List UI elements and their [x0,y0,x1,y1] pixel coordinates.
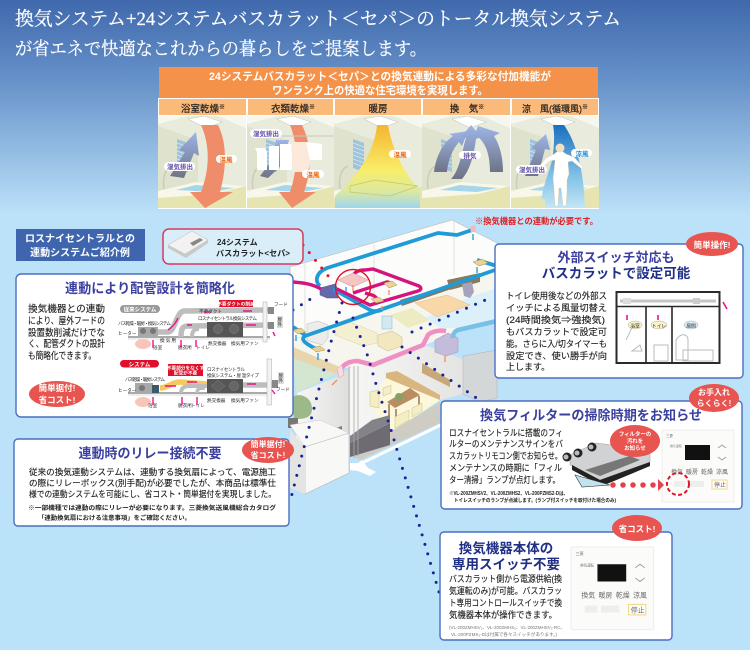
panel: simplified piping [16,274,293,417]
diagram: conventional system: トイレ [196,345,210,350]
footnote: ※VL-200ZMHSV2、VL-200ZMHS2、VL-200PZMS2-Dは、 [449,491,568,497]
product callout: 24 system [163,229,303,264]
floor plan diagram: トイレ [652,324,666,330]
lower floor kitchen and dining [288,350,497,460]
badge: easy install [29,381,85,407]
badge: easy care: らくらく! [697,399,731,408]
text block: スカラットリモコン側でお知らせ。 [449,450,562,461]
diagram: new system: システム [129,362,151,368]
diagram: new system: ヒーター [118,387,137,394]
scene: bathroom drying: 温風 [220,155,233,164]
scene: clothes drying: 衣類乾燥 [271,104,309,115]
diagram: new system: ロスナイセントラル [207,367,245,373]
diagram: conventional system: 換気用ファン [231,340,259,347]
text block: 様での連動システムを可能にし、省コスト・簡単据付を実現しました。 [29,488,276,499]
front wall block [290,420,349,447]
diagram: conventional system: 脱衣所 [178,344,192,351]
diagram: new system [118,359,290,409]
heading: 換気フィルターの掃除時期をお知らせ [480,407,702,423]
text block: もバスカラットで設定可 [506,327,607,337]
duct: magenta [293,269,421,305]
footnote [449,491,616,504]
note: ※一部機種では連動の際にリレーが必要になります。三菱換気送風機総合カタログ [28,504,277,512]
label: introduction heading [16,229,145,261]
text block [449,573,562,620]
heading [452,540,560,572]
heading: 専用スイッチ不要 [452,556,560,572]
diagram: conventional system: 不要ダクトの削減 [217,300,255,308]
orange heading band: 24システムバスカラット＜セパ＞との換気連動による多彩な付加機能が [209,69,551,83]
scene: bathroom drying: ※ [219,104,225,111]
diagram: conventional system: 屋 [278,317,282,323]
title: が省エネで快適なこれからの暮らしをご提案します。 [15,39,427,59]
panel: additional functions [158,67,599,209]
text block: メンテナンスの時期に「フィル [449,463,562,473]
text block: トイレ使用後などの外部ス [506,290,607,301]
diagram: new system: トイレ [191,403,205,408]
text block: バスカラット側から電源供給(換 [449,573,562,584]
text block: 気機器本体が操作できます。 [449,609,557,620]
heading [542,250,691,281]
scene: ventilation: 換 気 [450,104,478,115]
diagram: new system: バス乾燥・暖房システム [125,376,165,383]
diagram: conventional system: ヒーター [118,330,137,337]
text block: も簡略化できます。 [28,350,96,362]
diagram: conventional system: 換気用 [160,337,176,344]
red circle highlight [336,270,370,304]
floor plan diagram [616,292,727,363]
scene: heating: 温風 [394,150,407,159]
note: ventilation link required: ※換気機器との連動が必要です。 [475,216,598,226]
badge: easy install: 省コスト! [251,450,285,460]
scene: clothes drying: 湿気排出 [253,129,279,138]
badge: easy care: お手入れ [698,387,730,397]
diagram: new system: 換気用ファン [231,397,259,404]
diagram: new system: 換気システム・屋 温タイプ [207,372,259,379]
scene: heating: 暖房 [368,103,388,115]
heading: 連動時のリレー接続不要 [78,445,222,461]
callout: filter dirt [610,425,660,457]
scene: ventilation: ※ [478,104,484,111]
scene: bathroom drying [158,99,246,208]
diagram: new system: 不要部分をなくす [167,364,205,372]
scene: clothes drying: 温風 [306,170,320,179]
panel: filter cleaning [441,384,742,509]
product: ventilation unit [562,442,650,487]
grilles [293,259,488,352]
connector dots: navy [291,295,490,592]
scene: clothes drying [247,99,335,208]
badge: cost saving: 省コスト! [619,524,656,534]
text block [28,303,105,362]
heading: 外部スイッチ対応も [557,250,675,265]
scene: heating [334,99,422,208]
badge: easy install [242,437,294,463]
diagram: conventional system: ロスナイセントラル換気システム [198,315,257,322]
text block: 設定でき、使い勝手が向 [506,350,607,361]
text block [506,290,607,372]
note [28,504,277,522]
text block: ルターのメンテナンスサインをバ [449,439,563,449]
unit: heat exchanger [320,284,458,356]
footnote: (VL-200ZMHSV₂、VL-200ZMHS₂、VL-200ZMHSV₂-RC、 [449,625,565,630]
scene: bathroom drying: 湿気排出 [167,162,193,171]
floor plan diagram: 居間 [686,324,696,330]
scene: cool breeze: 涼 風(循環風) [522,104,582,114]
text block: ター清掃」ランプが点灯します。 [449,474,560,485]
heading: 換気機器本体の [459,540,553,556]
badge: easy install: 簡単据付! [39,383,76,393]
footnote [449,625,565,638]
diagram: conventional system: 不要ダクト [199,308,222,315]
text block: 換気機器との連動 [28,303,105,315]
diagram: conventional system [118,300,288,351]
diagram: new system: 外 [278,377,284,384]
duct: blue [293,230,497,350]
heading: バスカラットで設定可能 [542,265,691,281]
diagram: conventional system: 浴室 [153,344,163,351]
diagram: conventional system: 熱交換器 [208,340,227,347]
badge: easy operation: 簡単操作! [694,240,731,250]
title [15,8,621,59]
text block: 能。さらに入/切タイマーも [506,338,607,349]
ceiling outlet on roof [338,273,368,287]
text block: ロスナイセントラルに搭載のフィ [449,427,563,438]
scene: cool breeze: ※ [582,104,588,111]
lower floor walls [296,368,350,457]
diagram: conventional system: 外 [278,321,282,328]
icon: bathroom unit [168,231,208,258]
text block: 気運転のみ)が可能。バスカラッ [449,585,562,596]
arrow: dotted to remote [613,479,664,491]
text block: (24時間換気⇒強換気) [506,314,605,325]
text block: く、配管ダクトの設計 [28,338,105,350]
callout: filter dirt: フィルターの [619,430,651,438]
product callout: 24 system: バスカラット<セパ> [216,249,290,258]
diagram: new system: 浴室 [148,402,158,409]
remote control [662,430,734,502]
label: introduction heading: 連動システムご紹介例 [30,246,130,259]
title: 換気システム+24システムバスカラット＜セパ＞のトータル換気システム [15,8,621,30]
text block: の際にリレーボックス(別手配)が必要でしたが、本商品は標準仕 [29,477,276,488]
orange heading band [159,67,598,99]
badge: easy install: 省コスト! [39,395,76,405]
scene: clothes drying: ※ [309,104,315,111]
note: 「連動換気扇における注意事項」をご確認ください。 [38,514,191,522]
upper floor furniture [307,273,480,351]
footnote: トイレスイッチのランプが点滅します。(ランプ付スイッチを取付けた場合のみ) [454,497,616,504]
badge: easy care [689,384,739,412]
scene: cool breeze [511,99,599,208]
diagram: new system: フード [276,387,290,392]
flow arrows [296,234,477,385]
heading: 連動により配管設計を簡略化 [65,280,235,296]
diagram: conventional system: 従来システム [124,306,157,314]
dashed circle highlight [667,473,689,495]
remote control [571,547,654,630]
upper floor tinted rooms [293,288,497,393]
isometric house illustration [288,220,497,494]
upper wall [290,220,497,340]
duct: pink [341,331,446,369]
diagram: new system: 屋 [278,373,284,379]
panel: external switch [495,232,743,378]
scene: cool breeze: 湿気排出 [519,165,545,174]
badge: easy install: 簡単据付! [251,439,285,449]
footnote: VL-200PZMS₂-Dは付属で各々スイッチがあります。) [451,631,558,638]
text block [449,427,563,485]
panel: relay not required [14,437,294,526]
callout: filter dirt: お知らせ [624,444,646,452]
scene: ventilation [422,99,510,208]
label: introduction heading: ロスナイセントラルとの [25,233,135,245]
diagram: new system: 配管が不要 [174,370,198,376]
panel: dedicated switch not required [440,515,672,640]
diagram: conventional system: バス乾燥・暖房・換気システム [118,320,171,327]
text block: 従来の換気連動システムは、連動する換気扇によって、電源施工 [29,466,276,477]
product callout: 24 system: 24システム [217,238,258,247]
orange heading band: ワンランク上の快適な住宅環境を実現します。 [272,83,488,97]
text block: 上します。 [506,362,550,372]
diagram: new system: 熱交換器 [207,397,226,404]
scene: cool breeze: 涼風 [576,149,589,158]
diagram: conventional system: フード [274,302,288,307]
scene: ventilation: 排気 [464,151,477,160]
floor plan diagram: 浴室 [630,322,640,330]
text block: 設置数削減だけでな [28,327,105,339]
upper floor [293,268,497,368]
text block: イッチによる風量切替え [506,302,607,313]
badge: easy operation [686,232,738,256]
text block [29,466,276,499]
text block: により、屋外フードの [28,315,105,327]
scene: bathroom drying: 浴室乾燥 [181,104,219,115]
badge: cost saving [612,515,662,541]
connector dots: red [303,245,329,277]
callout: filter dirt: 汚れを [627,437,643,445]
text block: ト専用コントロールスイッチで換 [449,597,562,608]
diagram: new system: 脱衣所 [178,402,192,409]
